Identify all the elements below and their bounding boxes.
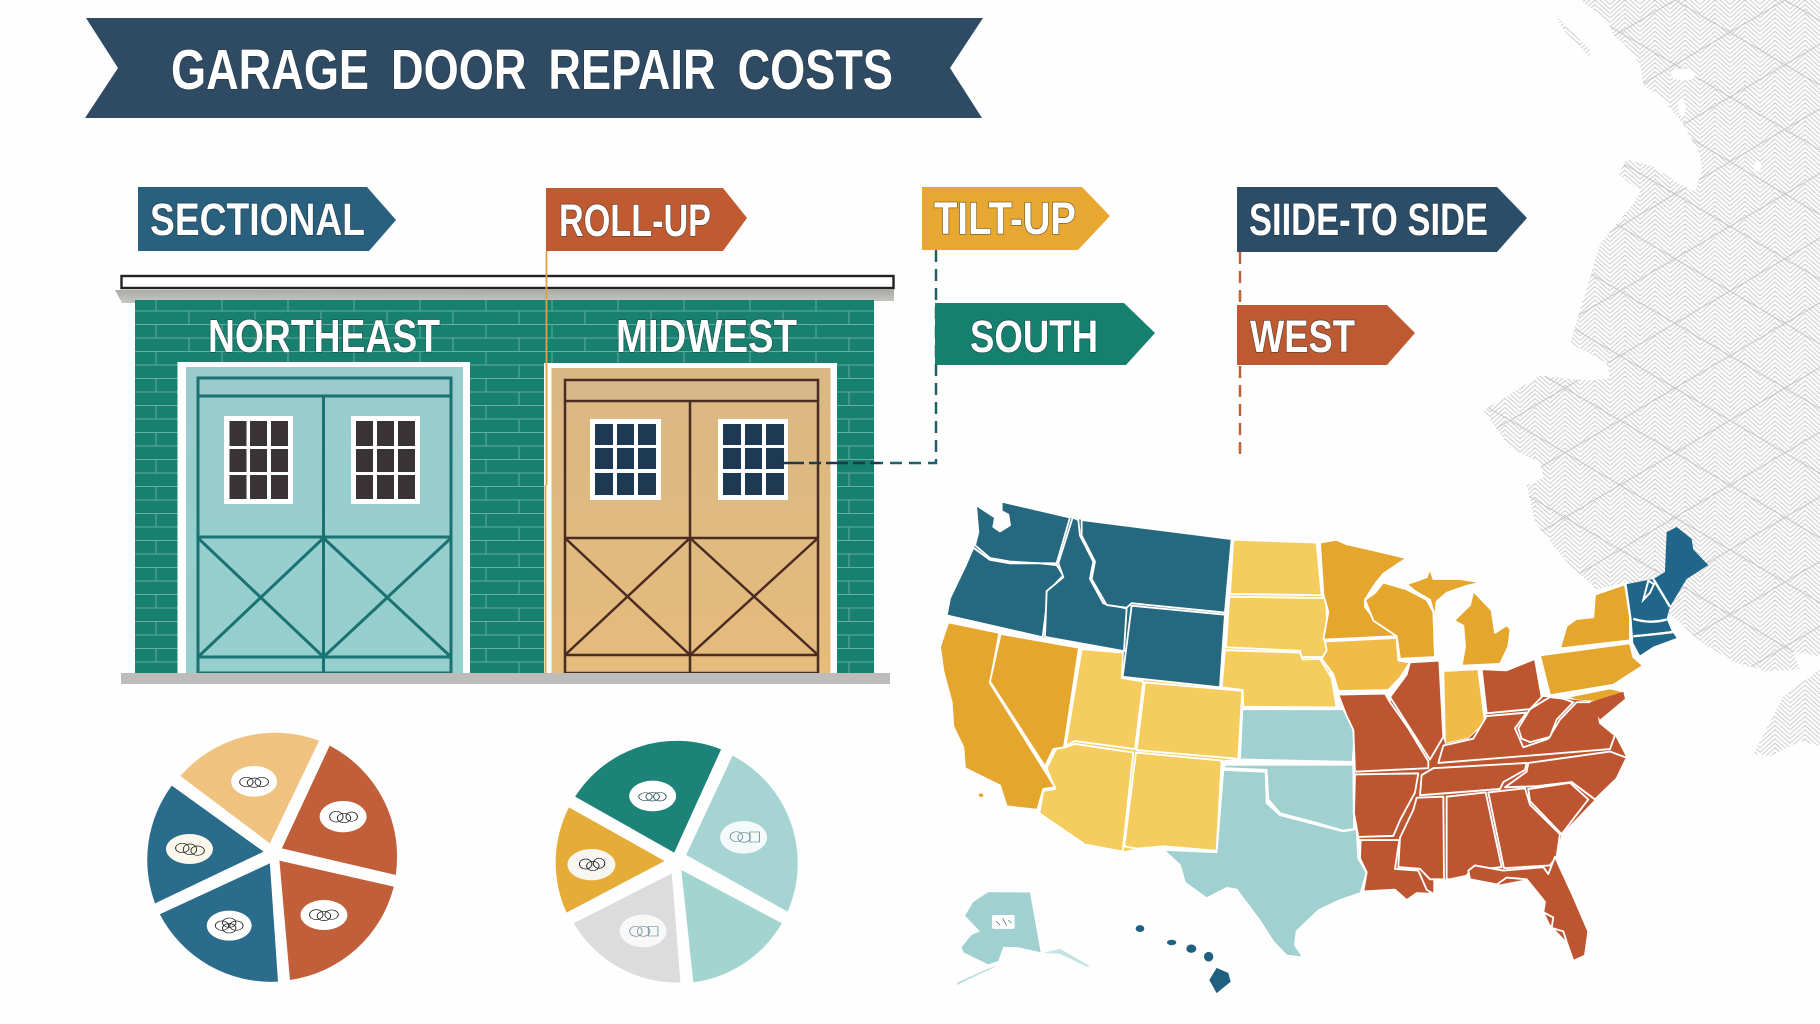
window: [590, 419, 661, 500]
tag: side-to-side: SIIDE-TO SIDE: [1249, 194, 1488, 245]
title banner: GARAGE DOOR REPAIR COSTS: [171, 38, 893, 102]
hawaii: [1136, 925, 1231, 993]
label: northeast: NORTHEAST: [208, 310, 440, 362]
US map: midwest, south and northeast: [1320, 527, 1708, 961]
title banner: [85, 18, 983, 118]
door: midwest: [544, 363, 837, 673]
slice: gray: [574, 873, 680, 983]
slice: blue left: [147, 786, 264, 903]
icon badge: [207, 911, 252, 941]
icon badge: [300, 900, 347, 930]
tag: side-to-side: [1237, 187, 1527, 252]
tag: west: WEST: [1250, 311, 1355, 362]
iowa and indiana: [1322, 638, 1485, 744]
brick wall: [135, 300, 874, 674]
slice: gold: [556, 807, 665, 913]
region: south central (light teal): [1163, 709, 1367, 957]
region: southeast (rust): [1338, 659, 1627, 961]
dashed connector: rust: [1239, 252, 1241, 456]
region: new england (blue): [1627, 527, 1708, 655]
dark leader from window: [782, 462, 880, 464]
hatched background land map: [1483, 0, 1820, 756]
US map: west and central: [940, 502, 1367, 993]
slice: tan: [180, 733, 319, 843]
dashed connector: teal: [880, 250, 936, 463]
region: northwest (blue): [947, 502, 1232, 687]
slice: rust upper: [282, 746, 397, 875]
window: [224, 416, 293, 504]
region: upper midwest (mustard): [1320, 540, 1643, 702]
garage building: [115, 276, 894, 684]
alaska: [957, 892, 1090, 985]
tag: south: SOUTH: [970, 311, 1098, 362]
slice: blue lower: [160, 863, 278, 982]
tag: sectional: SECTIONAL: [150, 194, 365, 245]
tag: tilt-up: TILT-UP: [934, 193, 1076, 244]
tag: west: [1237, 305, 1415, 365]
window: [351, 416, 420, 504]
window: [718, 419, 788, 500]
icon badge: [567, 849, 615, 880]
slice: teal: [575, 741, 721, 853]
gold leader line: [546, 251, 547, 673]
ground slab: [121, 673, 890, 684]
door: northeast: [178, 362, 470, 673]
slice: light lower: [681, 870, 782, 982]
label: midwest: MIDWEST: [616, 310, 797, 362]
roof: [115, 276, 894, 303]
slice: rust lower: [279, 861, 394, 980]
region: pacific (mustard): [940, 622, 1079, 810]
region: mountain and plains (yellow): [1039, 540, 1337, 852]
pie chart: left: [147, 733, 397, 982]
icon badge: [720, 821, 767, 854]
pie chart: right: [556, 741, 798, 983]
slice: light right: [686, 756, 798, 912]
tag: south: [935, 303, 1155, 365]
channel island: [979, 794, 983, 797]
icon badge: [629, 781, 676, 811]
tag: roll-up: ROLL-UP: [559, 195, 711, 246]
icon badge: [320, 801, 367, 832]
icon badge: [166, 834, 213, 864]
icon badge: [620, 915, 667, 947]
icon badge: [231, 766, 277, 797]
